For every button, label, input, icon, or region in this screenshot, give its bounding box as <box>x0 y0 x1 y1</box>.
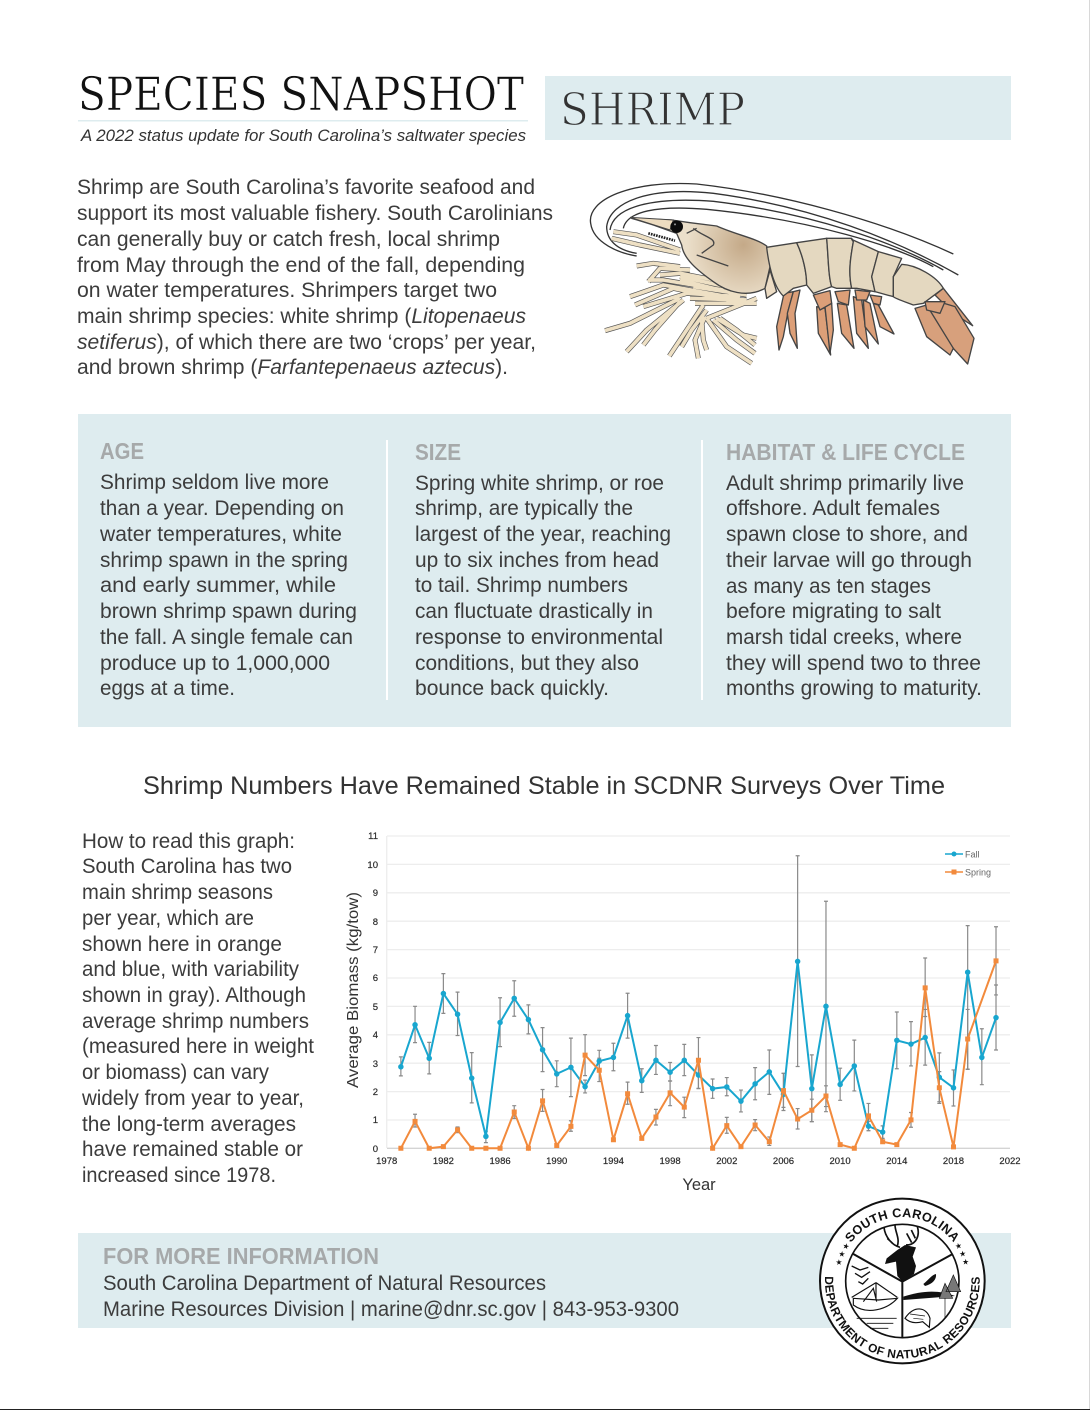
seal dividers <box>853 1254 953 1337</box>
column: size <box>415 439 671 700</box>
column: habitat and life cycle: Adult shrimp primarily live <box>726 472 964 495</box>
intro text: Shrimp are South Carolina’s favorite seafood and <box>77 176 535 199</box>
species name banner <box>545 76 1011 140</box>
how to read text: have remained stable or <box>82 1138 303 1161</box>
y axis title: Average Biomass (kg/tow) <box>345 892 362 1088</box>
column: size: largest of the year, reaching <box>415 523 671 546</box>
panel: more information <box>78 1233 1011 1328</box>
how to read text: South Carolina has two <box>82 855 292 878</box>
icon: fish <box>905 1309 930 1327</box>
intro text <box>77 176 553 379</box>
spring series <box>401 961 996 1148</box>
shrimp illustration <box>590 182 975 366</box>
y axis labels: 7 <box>373 945 378 956</box>
how to read text: main shrimp seasons <box>82 881 273 904</box>
panel: more information: FOR MORE INFORMATION <box>103 1243 379 1269</box>
y axis labels: 6 <box>373 973 378 984</box>
how to read text: the long-term averages <box>82 1113 296 1136</box>
x axis labels: 1998 <box>660 1156 681 1167</box>
intro text: can generally buy or catch fresh, local shrimp <box>77 228 500 251</box>
antennae <box>590 183 958 275</box>
seal text: ★ ★ ★ SOUTH CAROLINA ★ ★ ★ <box>836 1208 968 1265</box>
swimming legs <box>777 290 894 355</box>
column: habitat and life cycle: HABITAT & LIFE CYCLE <box>726 439 965 465</box>
x axis title: Year <box>682 1176 716 1194</box>
column: habitat and life cycle: months growing to maturity. <box>726 677 982 700</box>
legend: Fall <box>965 850 980 860</box>
column: habitat and life cycle: before migrating to salt <box>726 600 941 623</box>
intro text: on water temperatures. Shrimpers target two <box>77 279 497 302</box>
title: SPECIES SNAPSHOT <box>78 67 524 121</box>
column: habitat and life cycle <box>726 439 982 700</box>
how to read text: and blue, with variability <box>82 958 299 981</box>
x axis labels: 1990 <box>546 1156 567 1167</box>
x axis labels: 2022 <box>999 1156 1021 1167</box>
intro text: and brown shrimp (Farfantepenaeus aztecus). <box>77 356 508 379</box>
column: age: produce up to 1,000,000 <box>100 652 330 675</box>
legend: Spring <box>965 868 991 878</box>
seal text <box>825 1208 980 1358</box>
x axis labels: 1978 <box>376 1156 397 1167</box>
line chart: average biomass by year <box>345 831 1021 1194</box>
column: age: than a year. Depending on <box>100 497 344 520</box>
how to read text: average shrimp numbers <box>82 1010 309 1033</box>
seal text: DEPARTMENT OF NATURAL RESOURCES <box>825 1277 980 1358</box>
legend <box>945 850 991 878</box>
y axis labels <box>367 831 378 1155</box>
column: habitat and life cycle: marsh tidal creeks, where <box>726 626 962 649</box>
y axis labels: 11 <box>368 831 378 842</box>
column: size: conditions, but they also <box>415 652 639 675</box>
column: age: shrimp spawn in the spring <box>100 549 348 572</box>
intro text: support its most valuable fishery. South Carolinians <box>77 202 553 225</box>
intro text: from May through the end of the fall, depending <box>77 254 525 277</box>
column: size: can fluctuate drastically in <box>415 600 653 623</box>
y axis labels: 2 <box>373 1087 378 1098</box>
column: habitat and life cycle: spawn close to shore, and <box>726 523 968 546</box>
icon: birds <box>852 1266 870 1284</box>
species name banner: SHRIMP <box>560 83 745 136</box>
y axis labels: 8 <box>373 917 378 928</box>
subtitle: A 2022 status update for South Carolina’s saltwater species <box>80 126 526 145</box>
column: size: up to six inches from head <box>415 549 659 572</box>
column: age: eggs at a time. <box>100 677 235 700</box>
column: size: response to environmental <box>415 626 663 649</box>
column: age: and early summer, while <box>100 574 336 597</box>
column: size: Spring white shrimp, or roe <box>415 472 664 495</box>
x axis labels <box>376 1156 1021 1167</box>
x axis labels: 2018 <box>943 1156 964 1167</box>
how to read text: (measured here in weight <box>82 1035 314 1058</box>
x axis labels: 2006 <box>773 1156 794 1167</box>
walking legs <box>605 232 757 363</box>
column: age: brown shrimp spawn during <box>100 600 357 623</box>
logo: SCDNR seal <box>819 1198 986 1364</box>
chart heading: Shrimp Numbers Have Remained Stable in SCDNR Surveys Over Time <box>143 772 945 800</box>
icon: eagle and shore <box>903 1274 955 1300</box>
column: habitat and life cycle: their larvae will go through <box>726 549 972 572</box>
error bars <box>399 856 998 1143</box>
y axis labels: 0 <box>373 1144 378 1155</box>
carapace <box>632 218 777 298</box>
column: size: bounce back quickly. <box>415 677 609 700</box>
how to read text: or biomass) can vary <box>82 1061 269 1084</box>
how to read text: widely from year to year, <box>81 1087 304 1110</box>
how to read text: shown here in orange <box>82 933 282 956</box>
y axis labels: 1 <box>373 1115 378 1126</box>
tail fan <box>915 288 974 364</box>
how to read text: shown in gray). Although <box>82 984 306 1007</box>
intro text: setiferus), of which there are two ‘crops’ per year, <box>77 331 536 354</box>
x axis labels: 1982 <box>433 1156 454 1167</box>
column: size: to tail. Shrimp numbers <box>415 574 628 597</box>
column: habitat and life cycle: as many as ten stages <box>726 575 931 598</box>
column: size: shrimp, are typically the <box>415 497 633 520</box>
y axis labels: 9 <box>373 888 378 899</box>
column: age: water temperatures, white <box>99 523 342 546</box>
x axis labels: 2010 <box>830 1156 851 1167</box>
column: age: the fall. A single female can <box>100 626 353 649</box>
y axis labels: 5 <box>373 1002 378 1013</box>
how to read text: increased since 1978. <box>82 1164 276 1187</box>
head and eye <box>630 217 683 241</box>
icon: deer <box>884 1225 918 1282</box>
intro text: main shrimp species: white shrimp (Litopenaeus <box>77 305 526 328</box>
panel: more information: South Carolina Department of Natural Resources <box>103 1272 546 1295</box>
x axis labels: 1986 <box>490 1156 511 1167</box>
y axis labels: 4 <box>373 1030 378 1041</box>
how to read text <box>81 830 314 1187</box>
icon: shrimp boat <box>852 1283 897 1328</box>
y axis labels: 10 <box>367 860 378 871</box>
column: size: SIZE <box>415 439 461 465</box>
x axis labels: 1994 <box>603 1156 624 1167</box>
column: habitat and life cycle: offshore. Adult females <box>726 497 940 520</box>
panel: life history facts <box>78 414 1011 727</box>
column: age <box>99 438 357 700</box>
x axis labels: 2002 <box>716 1156 737 1167</box>
how to read text: How to read this graph: <box>82 830 295 853</box>
y axis labels: 3 <box>373 1059 378 1070</box>
icon: tree <box>939 1275 961 1318</box>
column: habitat and life cycle: they will spend two to three <box>726 652 981 675</box>
how to read text: per year, which are <box>82 907 254 930</box>
panel: more information: Marine Resources Division | marine@dnr.sc.gov | 843-953-9300 <box>103 1298 679 1321</box>
column: age: AGE <box>100 438 144 464</box>
fall series <box>401 961 996 1136</box>
x axis labels: 2014 <box>886 1156 907 1167</box>
column: age: Shrimp seldom live more <box>100 471 329 494</box>
plotted data <box>399 856 998 1148</box>
abdomen <box>767 238 943 305</box>
